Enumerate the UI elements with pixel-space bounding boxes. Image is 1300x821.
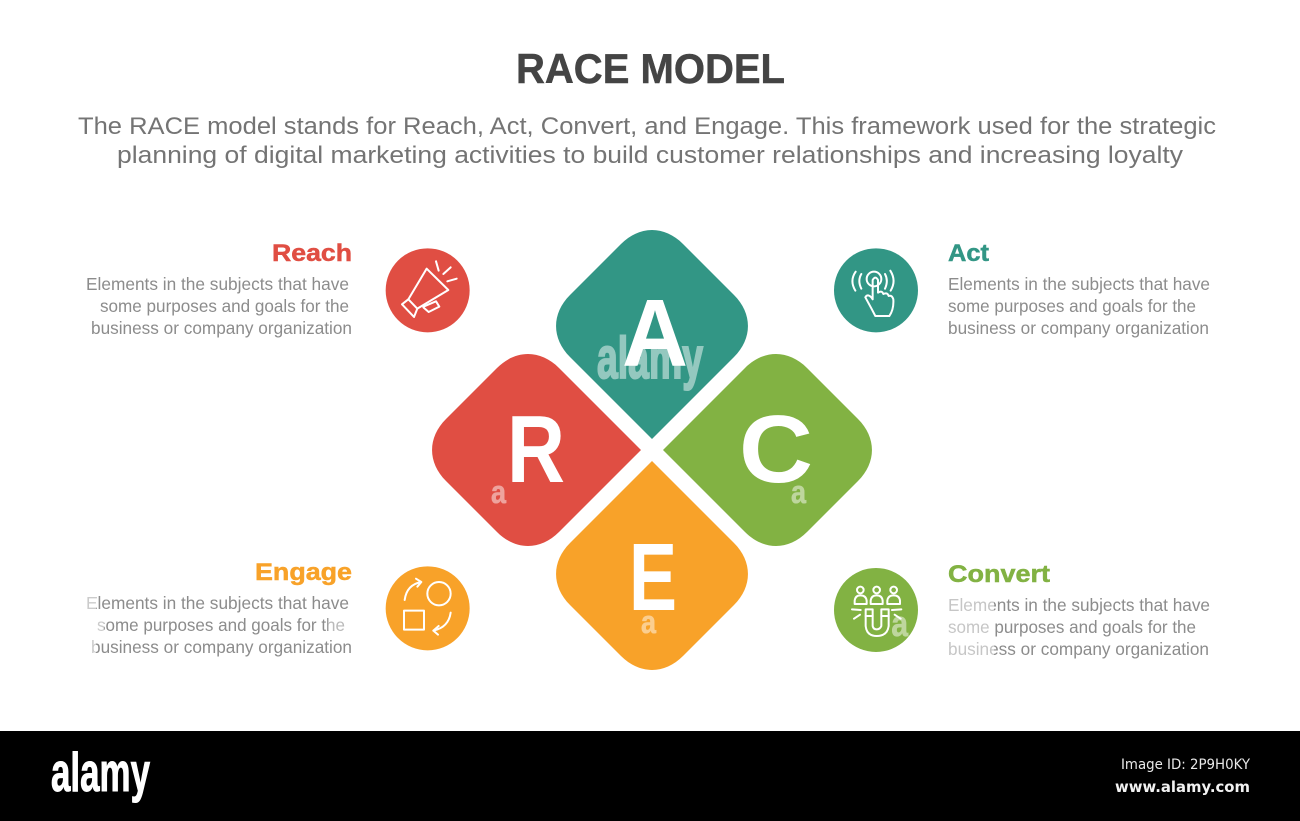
block: Act: business or company organization (948, 318, 1209, 338)
icon: magnet and people: a (891, 603, 909, 644)
petal: C (Convert): C (739, 396, 813, 503)
petal: R (Reach): R (507, 396, 565, 503)
petal: A (Act): A (622, 280, 688, 387)
block: Engage (84, 559, 352, 658)
subtitle text: planning of digital marketing activities to build customer relationships and increasing loyalty (117, 142, 1184, 169)
block: Reach: Reach (272, 240, 352, 267)
block: Reach: some purposes and goals for the (100, 296, 349, 316)
block: Act: some purposes and goals for the (948, 296, 1196, 316)
watermark: small letters: a (791, 474, 806, 510)
block: Convert: some purposes and goals for the (948, 617, 1196, 637)
subtitle text (78, 113, 1216, 169)
footer url: www.alamy.com (1115, 778, 1250, 796)
icon: magnet and people (834, 568, 918, 652)
watermark: small letters (491, 474, 806, 640)
block: Engage: Elements in the subjects that have (86, 593, 349, 613)
block: Convert: Elements in the subjects that have (948, 595, 1210, 615)
icon: touch hand (834, 248, 918, 332)
petal: A (Act) (556, 230, 748, 439)
block: Act: Elements in the subjects that have (948, 274, 1210, 294)
block: Engage: business or company organization (91, 637, 352, 657)
petal: E (Engage) (556, 461, 748, 670)
block: Convert: Convert (948, 561, 1050, 588)
block: Reach: business or company organization (91, 318, 352, 338)
footer band (0, 731, 1300, 821)
block: Reach (86, 240, 352, 338)
icon: shapes cycle (386, 566, 470, 650)
petal: E (Engage): E (629, 524, 677, 631)
footer logo: alamy (51, 741, 150, 803)
block: Reach: Elements in the subjects that have (86, 274, 349, 294)
petal: R (Reach) (432, 354, 641, 546)
block: Engage: some purposes and goals for the (97, 615, 345, 635)
watermark: small letters: a (641, 604, 656, 640)
block: Convert (946, 561, 1210, 660)
title: RACE MODEL (516, 45, 785, 92)
watermark: centre: alamy (597, 326, 703, 391)
block: Engage: Engage (255, 559, 352, 586)
watermark: small letters: a (491, 474, 506, 510)
petal: C (Convert) (663, 354, 872, 546)
block: Convert: business or company organization (948, 639, 1209, 659)
footer image id: Image ID: 2P9H0KY (1121, 757, 1250, 773)
block: Act: Act (948, 240, 989, 267)
subtitle text: The RACE model stands for Reach, Act, Convert, and Engage. This framework used for the strategic (78, 113, 1216, 140)
block: Act (948, 240, 1210, 338)
icon: megaphone (386, 248, 470, 332)
